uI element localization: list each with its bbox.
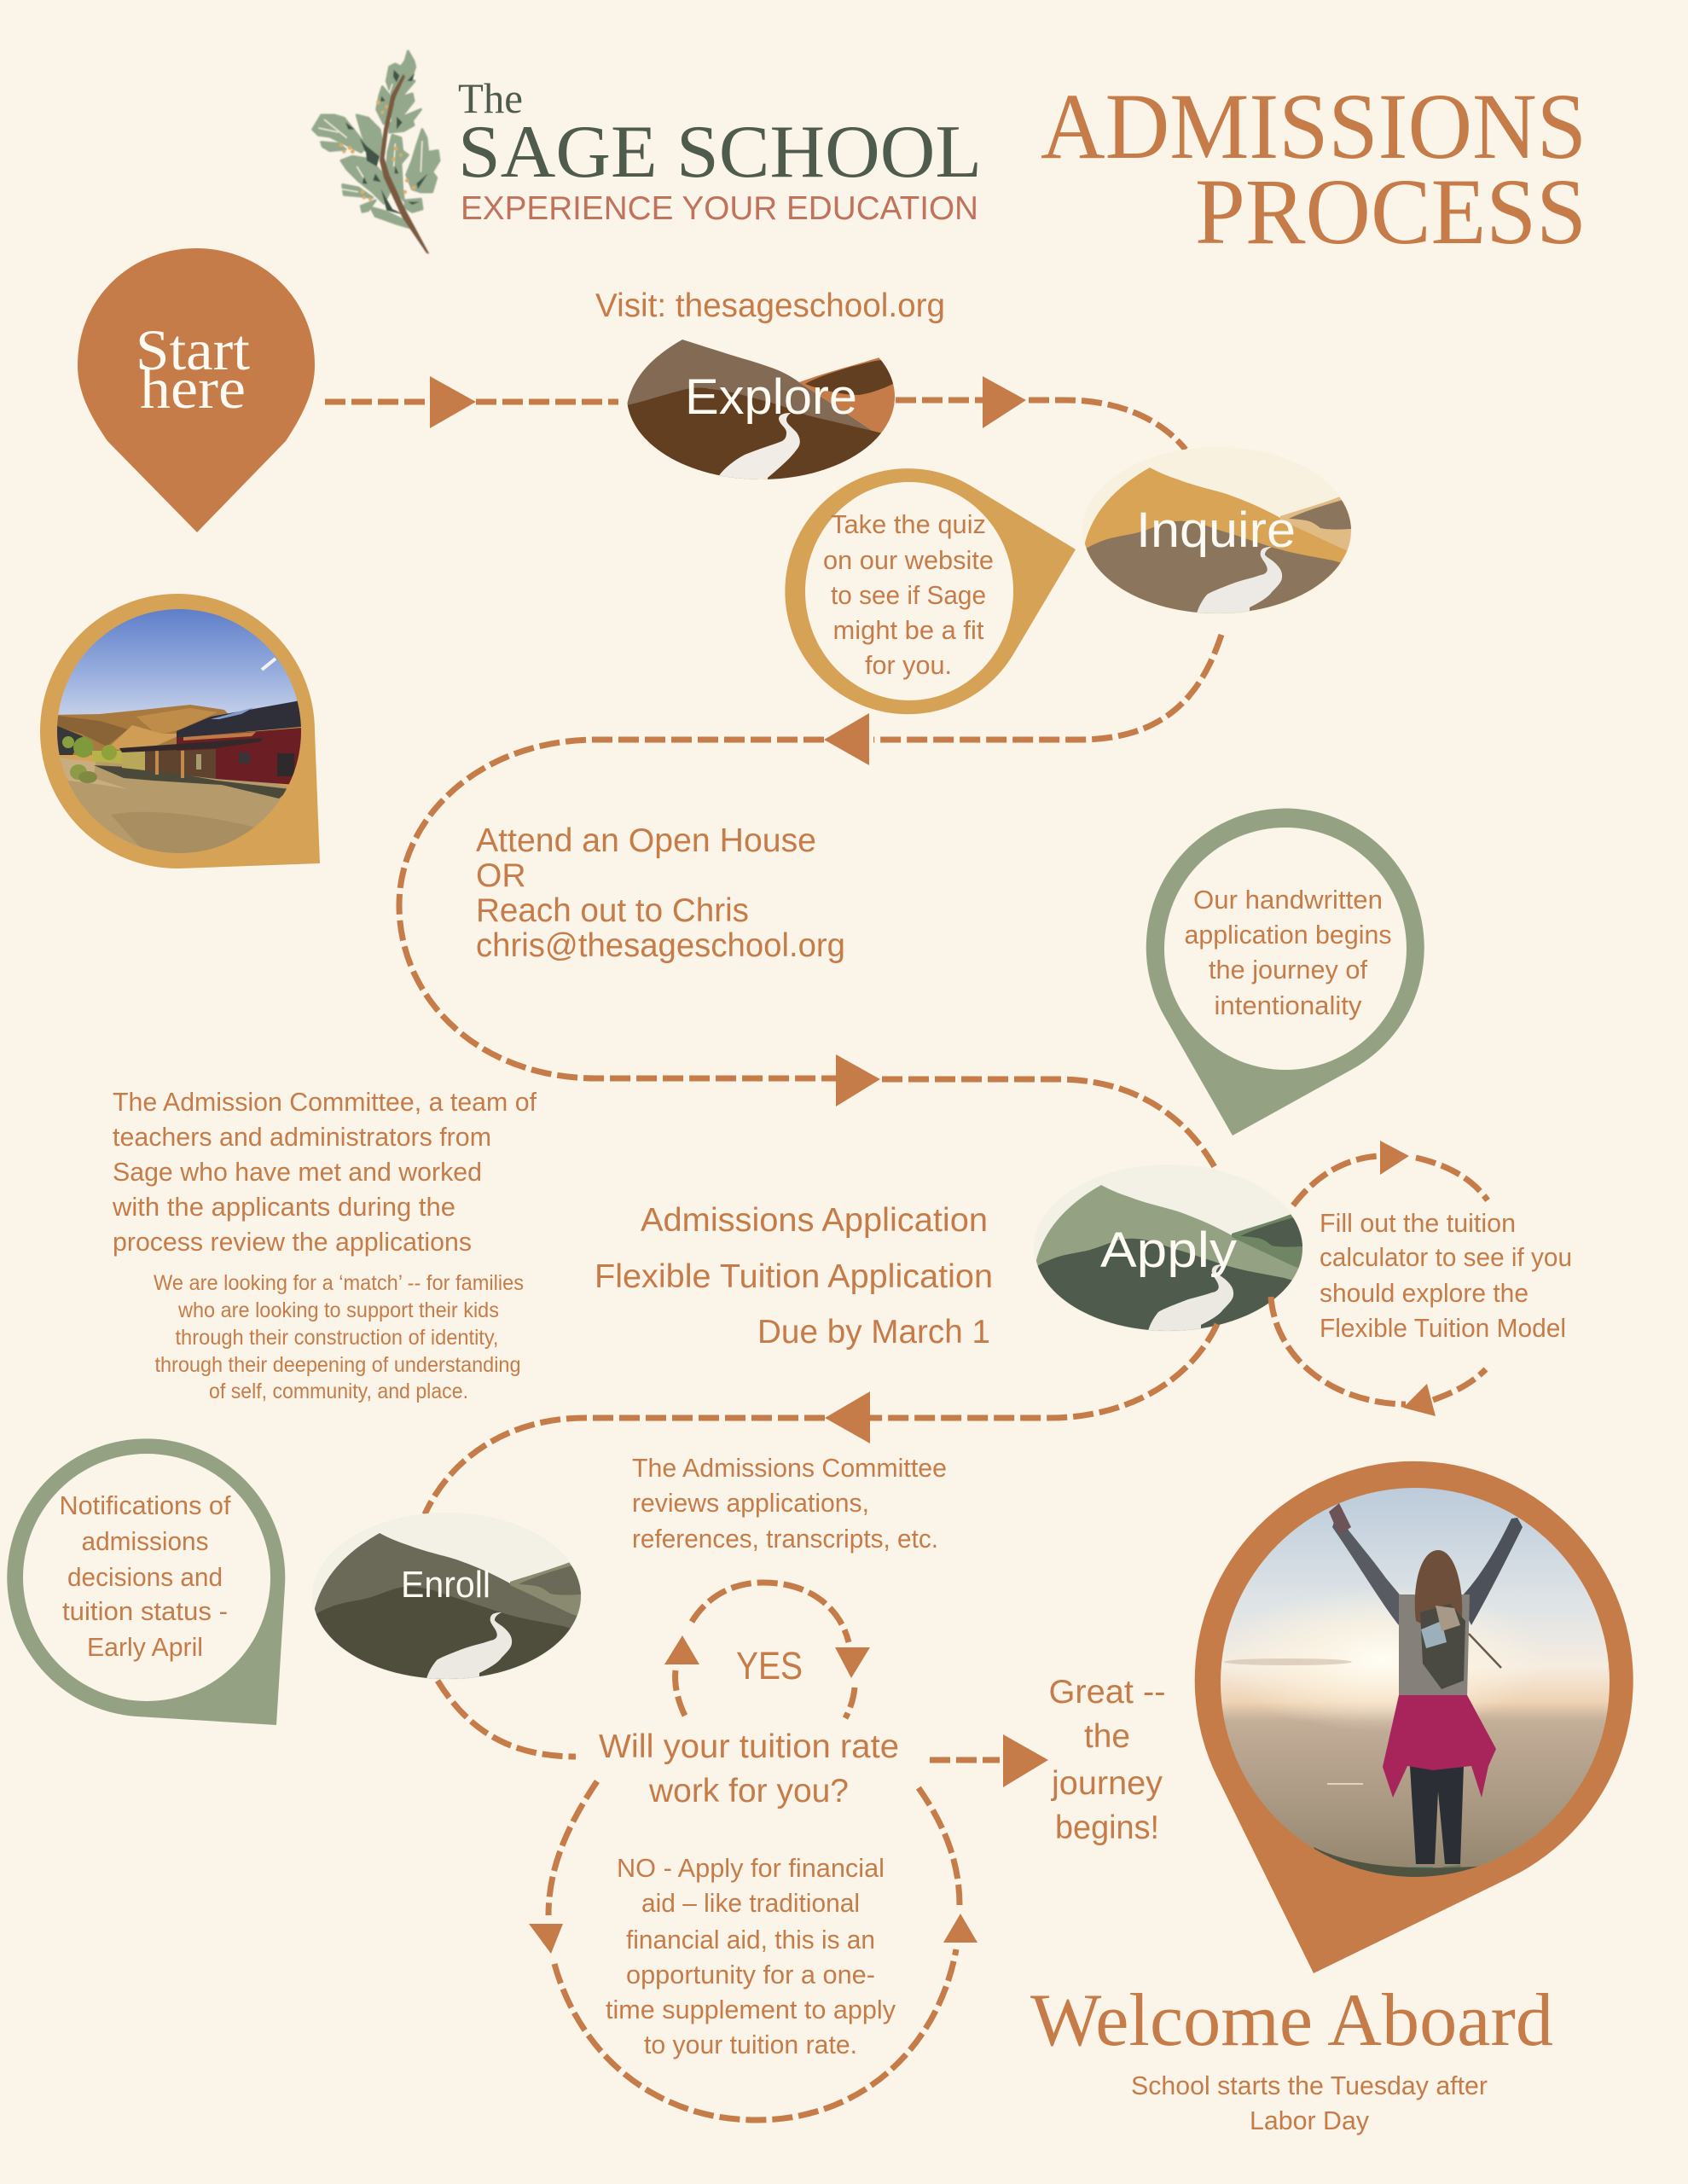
step: explore landscape [628, 340, 895, 479]
loop arrow: no [529, 1781, 977, 2120]
title: Admissions Process: PROCESS [1195, 160, 1586, 264]
text: looking for a match: through their deepening of understanding [155, 1353, 520, 1377]
text: tuition calculator [1320, 1208, 1572, 1343]
text: committee reviews: reviews applications, [632, 1488, 869, 1518]
text: no financial aid: financial aid, this is an [626, 1925, 875, 1955]
callout pin: take the quiz [785, 468, 1076, 714]
callout pin: notifications: tuition status - [62, 1596, 228, 1626]
callout pin: take the quiz: might be a fit [832, 615, 984, 645]
arrow: start to explore [325, 376, 618, 428]
text: open house: Reach out to Chris [476, 892, 749, 929]
text: tuition question [599, 1728, 899, 1809]
loop arrow: tuition calculator [1271, 1141, 1488, 1416]
text: admission committee: The Admission Committee, a team of [113, 1087, 537, 1117]
callout pin: handwritten application: intentionality [1215, 990, 1362, 1020]
text: school start date: School starts the Tuesday after [1131, 2071, 1488, 2100]
text: committee reviews: references, transcripts, etc. [632, 1524, 938, 1554]
text: admission committee [112, 1087, 537, 1257]
pin: start here [78, 248, 315, 532]
text: looking for a match: through their construction of identity, [176, 1326, 498, 1350]
label: apply: Apply [1100, 1223, 1237, 1278]
text: open house: chris@thesageschool.org [476, 927, 845, 964]
callout pin: take the quiz: on our website [823, 545, 994, 575]
text: yes: YES [736, 1644, 803, 1687]
text: tuition question: work for you? [648, 1773, 849, 1809]
text: committee reviews: The Admissions Committee [632, 1453, 947, 1483]
callout pin: take the quiz: Take the quiz [831, 509, 986, 539]
callout pin: handwritten application: the journey of [1209, 955, 1367, 985]
text: looking for a match: We are looking for a ‘match’ -- for families [154, 1271, 524, 1295]
text: no financial aid: time supplement to apply [606, 1995, 896, 2024]
text: looking for a match [154, 1271, 524, 1403]
photo: hiker with raised arms [1220, 1488, 1610, 1885]
icon: sage sprig [313, 51, 439, 254]
loop arrow: yes [664, 1583, 870, 1718]
logo tagline: EXPERIENCE YOUR EDUCATION [461, 190, 978, 227]
text: journey begins: begins! [1055, 1809, 1159, 1846]
text: admission committee: process review the applications [113, 1227, 472, 1257]
callout pin: notifications [7, 1438, 285, 1725]
callout pin: notifications: decisions and [67, 1562, 223, 1592]
step: apply landscape [1035, 1185, 1302, 1331]
text: tuition calculator: calculator to see if you [1320, 1242, 1572, 1272]
callout pin: handwritten application: Our handwritten [1193, 885, 1383, 915]
photo: school building [51, 606, 307, 862]
arrow: explore to inquire [896, 376, 1186, 450]
text: admission committee: teachers and administrators from [113, 1122, 491, 1152]
arrow: enroll to tuition question [438, 1681, 576, 1757]
heading: welcome aboard: Welcome Aboard [1030, 1979, 1553, 2062]
arrow: to journey begins [930, 1734, 1048, 1787]
text: no financial aid [606, 1853, 896, 2059]
text: open house: OR [476, 857, 525, 894]
label: enroll: Enroll [401, 1564, 490, 1606]
text: journey begins [1049, 1674, 1165, 1846]
text: open house: Attend an Open House [476, 822, 816, 859]
text: journey begins: Great -- [1049, 1674, 1165, 1711]
text: applications due: Due by March 1 [757, 1314, 990, 1350]
text: admission committee: Sage who have met and worked [113, 1157, 482, 1187]
pin: hiker photo [1195, 1461, 1633, 1973]
arrow: inquire to open house and apply [399, 635, 1221, 1167]
title: Admissions Process [1041, 74, 1586, 264]
text: no financial aid: NO - Apply for financial [617, 1853, 885, 1883]
text: no financial aid: opportunity for a one- [626, 1960, 875, 1989]
step: inquire landscape [1082, 447, 1352, 614]
text: school start date [1131, 2071, 1488, 2135]
text: tuition calculator: Flexible Tuition Model [1320, 1313, 1566, 1343]
text: open house [476, 822, 845, 964]
text: school start date: Labor Day [1250, 2106, 1369, 2135]
text: applications due [595, 1202, 993, 1350]
logo text: Sage School: SAGE SCHOOL [458, 111, 982, 194]
title: Admissions Process: ADMISSIONS [1041, 74, 1586, 178]
text: committee reviews [632, 1453, 947, 1554]
callout pin: notifications: admissions [82, 1526, 208, 1556]
callout pin: handwritten application [1146, 809, 1424, 1136]
logo text: The: The [458, 74, 523, 122]
text: visit website: Visit: thesageschool.org [595, 288, 945, 324]
text: applications due: Admissions Application [641, 1202, 988, 1239]
label: inquire: Inquire [1136, 502, 1296, 558]
pin: campus photo [40, 594, 320, 868]
text: no financial aid: to your tuition rate. [644, 2030, 857, 2059]
step: enroll landscape [314, 1513, 581, 1679]
callout pin: take the quiz: for you. [865, 650, 952, 680]
callout pin: take the quiz: to see if Sage [831, 580, 986, 610]
text: looking for a match: who are looking to support their kids [177, 1298, 499, 1322]
text: journey begins: the [1084, 1718, 1130, 1755]
text: no financial aid: aid – like traditional [641, 1888, 860, 1918]
text: looking for a match: of self, community, and place. [209, 1380, 468, 1403]
logo: The Sage School [313, 51, 982, 254]
callout pin: notifications: Early April [87, 1632, 203, 1662]
label: explore: Explore [685, 369, 857, 425]
text: tuition calculator: Fill out the tuition [1320, 1208, 1516, 1238]
arrow: apply to enroll [425, 1324, 1217, 1514]
pin: start here: Start [136, 317, 250, 382]
text: journey begins: journey [1051, 1765, 1163, 1802]
callout pin: notifications: Notifications of [60, 1490, 231, 1520]
pin: start here: here [140, 356, 246, 421]
text: tuition calculator: should explore the [1320, 1278, 1528, 1308]
text: tuition question: Will your tuition rate [599, 1728, 899, 1765]
text: admission committee: with the applicants during the [112, 1192, 455, 1222]
callout pin: handwritten application: application begins [1184, 920, 1392, 950]
text: applications due: Flexible Tuition Application [595, 1258, 993, 1295]
